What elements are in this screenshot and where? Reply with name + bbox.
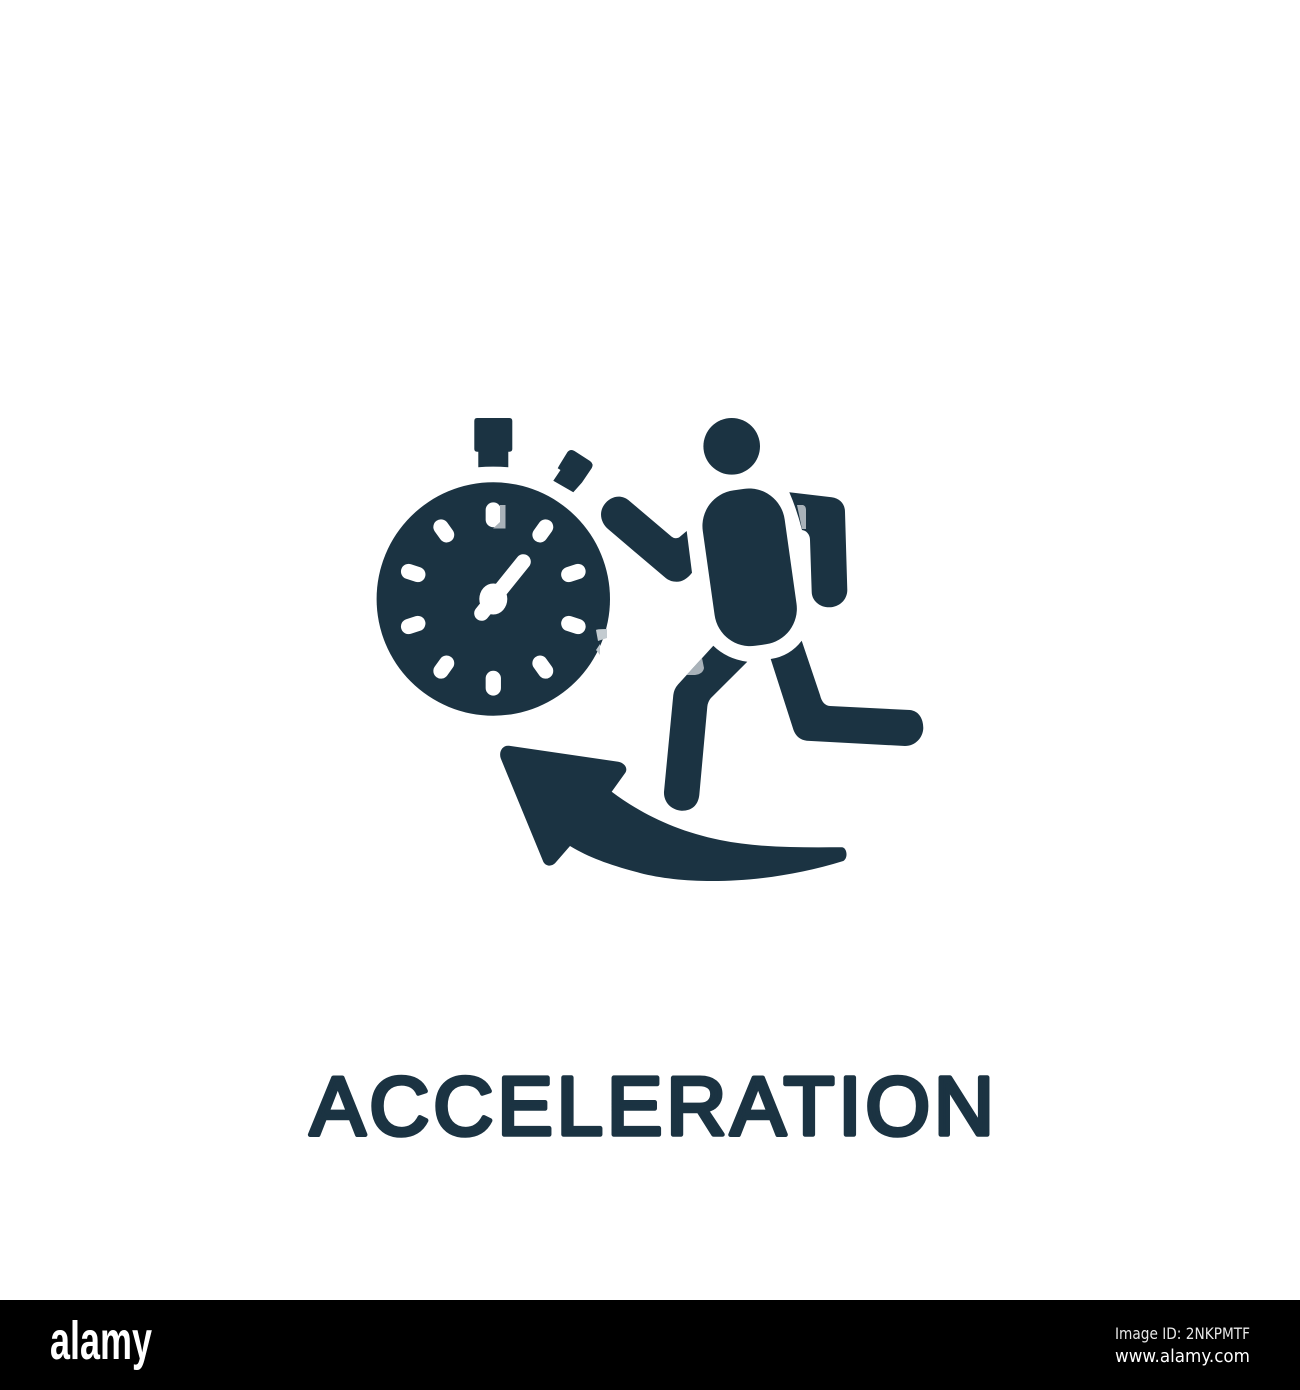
stopwatch side button xyxy=(553,450,593,492)
footer image ID: Image ID: 2NKPMTF xyxy=(1115,1324,1250,1343)
watermark trace on back arm xyxy=(797,505,806,529)
runner back arm xyxy=(789,492,847,607)
icon: acceleration symbol xyxy=(377,418,923,881)
watermark traces on dial xyxy=(493,505,506,528)
runner torso xyxy=(698,484,802,651)
stopwatch top button xyxy=(474,418,512,467)
runner front leg xyxy=(664,646,747,811)
title: ACCELERATION: ACCELERATION xyxy=(310,1060,994,1153)
watermark trace on front leg xyxy=(686,658,704,675)
dial tick marks xyxy=(409,510,578,688)
footer bar xyxy=(0,1300,1300,1390)
icon: curved arrow xyxy=(500,746,847,881)
footer logo: alamy: alamy xyxy=(50,1311,152,1371)
footer website: www.alamy.com xyxy=(1115,1346,1250,1367)
runner head xyxy=(703,418,760,475)
runner back leg xyxy=(771,641,923,746)
runner front arm xyxy=(601,497,692,582)
watermark trace on dial edge xyxy=(596,629,607,655)
icon: stopwatch xyxy=(377,418,610,716)
stopwatch dial xyxy=(377,482,610,716)
stopwatch hand xyxy=(479,562,523,614)
icon: running person xyxy=(601,418,923,811)
